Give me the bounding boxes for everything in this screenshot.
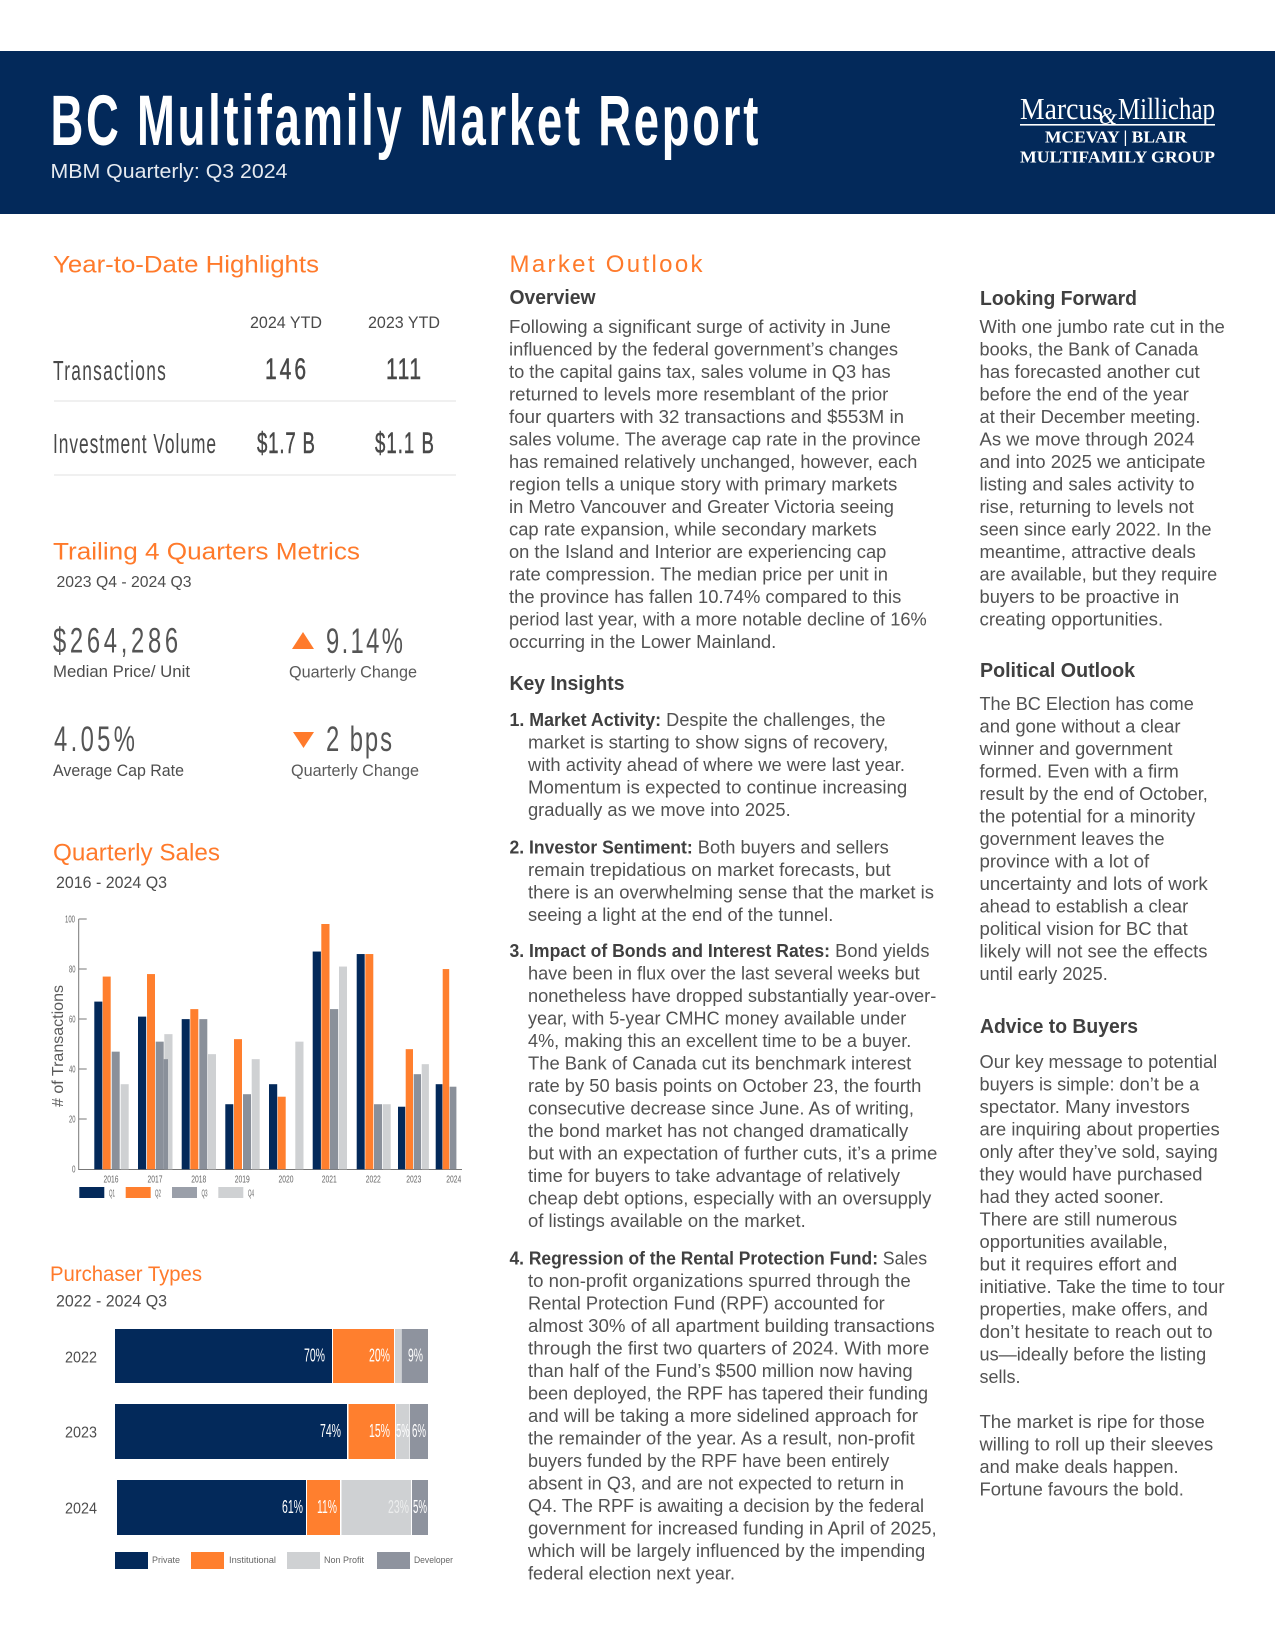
stacked bar: 2024: 5%	[413, 1497, 427, 1517]
insight 2: investor sentiment: seeing a light at the end of the tunnel.	[528, 905, 833, 925]
text block: political outlook: until early 2025.	[980, 964, 1108, 984]
logo: Marcus & Millichap McEvay Blair Multifamily Group: MCEVAY | BLAIR	[1045, 128, 1188, 146]
text block: advice to buyers: only after they’ve sold, saying	[980, 1142, 1218, 1162]
insight 4: regression of the rental protection fund: Q4. The RPF is awaiting a decision by the federal	[528, 1496, 924, 1516]
insight 4: regression of the rental protection fund: buyers funded by the RPF have been entirely	[528, 1451, 889, 1471]
insight 4: regression of the rental protection fund: almost 30% of all apartment building transactions	[528, 1316, 935, 1336]
panel: outlook right column	[978, 288, 1225, 1500]
text block: looking forward: before the end of the year	[980, 384, 1189, 404]
insight 4: regression of the rental protection fund: to non-profit organizations spurred through the	[528, 1271, 911, 1291]
text block: closing message: and make deals happen.	[980, 1457, 1178, 1477]
text block: overview: sales volume. The average cap rate in the province	[509, 430, 921, 450]
insight 1: market activity: 1. Market Activity:	[510, 710, 661, 730]
insight 1: market activity	[510, 710, 907, 820]
text block: overview: to the capital gains tax, sales volume in Q3 has	[509, 362, 891, 382]
heading: Market Outlook: Market Outlook	[510, 251, 704, 278]
x-axis labels: 2019	[235, 1174, 250, 1186]
row: investment volume	[53, 427, 434, 460]
text block: looking forward: buyers to be proactive in	[980, 587, 1179, 607]
row: transactions: 146	[265, 354, 306, 386]
text block: political outlook: ahead to establish a clear	[980, 896, 1188, 916]
text block: overview: Following a significant surge of activity in June	[509, 317, 891, 337]
logo: Marcus & Millichap McEvay Blair Multifamily Group: MULTIFAMILY GROUP	[1020, 148, 1215, 166]
text block: advice to buyers: are inquiring about properties	[980, 1120, 1220, 1140]
text block: looking forward: has forecasted another cut	[980, 362, 1200, 382]
text block: advice to buyers: spectator. Many investors	[980, 1097, 1190, 1117]
heading: Trailing 4 Quarters Metrics: Trailing 4 Quarters Metrics	[53, 538, 360, 566]
stacked bar: 2024: 23%	[388, 1497, 409, 1517]
y-axis labels: 80	[69, 964, 76, 976]
stacked bar: 2024	[65, 1480, 428, 1535]
subtitle: MBM Quarterly: Q3 2024	[50, 161, 288, 183]
text block: political outlook: political vision for BC that	[980, 919, 1188, 939]
metric: cap rate quarterly change	[291, 721, 419, 780]
stacked bar: 2024: 2024	[65, 1500, 97, 1518]
text block: political outlook	[978, 694, 1209, 984]
heading: Purchaser Types: Purchaser Types	[50, 1263, 202, 1286]
x-axis labels: 2024	[446, 1174, 461, 1186]
text block: looking forward: With one jumbo rate cut in the	[980, 317, 1225, 337]
panel: purchaser types	[50, 1263, 453, 1569]
insight 3: impact of bonds and interest rates: time for buyers to take advantage of relatively	[528, 1166, 900, 1186]
text block: overview: the province has fallen 10.74% compared to this	[509, 587, 901, 607]
metric: median price per unit: Median Price/ Unit	[53, 663, 190, 681]
legend: Institutional	[229, 1555, 276, 1566]
insight 4: regression of the rental protection fund: federal election next year.	[528, 1564, 735, 1584]
insight 3: impact of bonds and interest rates: but with an expectation of further cuts, it’s a prime	[528, 1144, 937, 1164]
subheading: Overview: Overview	[510, 287, 596, 309]
stacked bar: 2023: 5%	[396, 1421, 410, 1441]
insight 1: market activity: Despite the challenges, the	[666, 710, 886, 730]
legend: Q3	[202, 1188, 208, 1200]
logo: Marcus & Millichap McEvay Blair Multifamily Group	[1020, 91, 1215, 166]
row: transactions: 111	[386, 354, 421, 386]
x-axis labels: 2023	[406, 1174, 421, 1186]
insight 3: impact of bonds and interest rates: of listings available on the market.	[528, 1211, 806, 1231]
stacked bar: 2023	[65, 1404, 428, 1459]
metric: median price quarterly change	[289, 623, 417, 682]
insight 3: impact of bonds and interest rates: The Bank of Canada cut its benchmark interest	[528, 1054, 911, 1074]
row: transactions: Transactions	[53, 355, 166, 386]
metric: median price quarterly change: 9.14%	[326, 623, 403, 661]
metric: average cap rate: 4.05%	[54, 721, 135, 759]
insight 3: impact of bonds and interest rates: the bond market has not changed dramatically	[528, 1121, 908, 1141]
insight 3: impact of bonds and interest rates: Bond yields	[835, 941, 930, 961]
text block: closing message: The market is ripe for those	[980, 1412, 1205, 1432]
insight 4: regression of the rental protection fund: through the first two quarters of 2024. With more	[528, 1338, 929, 1358]
legend	[115, 1552, 453, 1569]
y-axis labels: 60	[69, 1014, 76, 1026]
text block: advice to buyers: they would have purchased	[980, 1164, 1202, 1184]
text block: advice to buyers: but it requires effort and	[980, 1254, 1177, 1274]
text block: overview: four quarters with 32 transactions and $553M in	[509, 407, 904, 427]
text block: looking forward: listing and sales activity to	[980, 474, 1194, 494]
row: investment volume: $1.1 B	[375, 427, 434, 460]
insight 2: investor sentiment: Both buyers and sellers	[698, 838, 889, 858]
insight 3: impact of bonds and interest rates: rate by 50 basis points on October 23, the fourth	[528, 1076, 921, 1096]
x-axis labels: 2016	[104, 1174, 119, 1186]
text block: political outlook: winner and government	[978, 739, 1172, 759]
y-axis labels: 0	[72, 1164, 76, 1176]
stacked bar: 2022: 70%	[304, 1346, 325, 1366]
logo: Marcus & Millichap McEvay Blair Multifamily Group: &	[1099, 104, 1117, 130]
insight 3: impact of bonds and interest rates: consecutive decrease since June. As of writing,	[528, 1098, 914, 1118]
metric: median price quarterly change: Quarterly Change	[289, 664, 417, 682]
subheading: Advice to Buyers: Advice to Buyers	[980, 1016, 1138, 1038]
stacked bar: 2024: 61%	[282, 1497, 303, 1517]
text block: advice to buyers: us—ideally before the listing	[980, 1344, 1206, 1364]
text block: overview	[509, 317, 927, 652]
insight 3: impact of bonds and interest rates	[510, 941, 937, 1231]
text block: overview: has remained relatively unchanged, however, each	[509, 452, 917, 472]
metric: median price per unit	[53, 622, 190, 681]
text block: advice to buyers: properties, make offers, and	[980, 1300, 1208, 1320]
insight 3: impact of bonds and interest rates: have been in flux over the last several weeks but	[528, 964, 920, 984]
legend: Private	[152, 1555, 180, 1566]
stacked bar: 2022: 9%	[408, 1346, 423, 1366]
insight 3: impact of bonds and interest rates: year, with 5-year CMHC money available under	[528, 1008, 906, 1028]
logo: Marcus & Millichap McEvay Blair Multifamily Group: Marcus	[1020, 91, 1103, 126]
text block: advice to buyers: opportunities available,	[980, 1232, 1168, 1252]
legend	[79, 1187, 254, 1200]
metric: median price per unit: $264,286	[53, 622, 178, 661]
insight 3: impact of bonds and interest rates: 4%, making this an excellent time to be a buyer.	[528, 1031, 911, 1051]
insight 4: regression of the rental protection fund: Sales	[883, 1248, 927, 1268]
heading: Quarterly Sales: Quarterly Sales	[53, 840, 220, 866]
header banner	[0, 51, 1275, 214]
y-axis labels: 20	[69, 1114, 76, 1126]
text block: political outlook: The BC Election has come	[980, 694, 1194, 714]
insight 3: impact of bonds and interest rates: nonetheless have dropped substantially year-over-	[528, 986, 936, 1006]
text block: advice to buyers	[980, 1052, 1224, 1387]
subheading: Key Insights: Key Insights	[510, 673, 624, 695]
stacked bar: 2023: 74%	[320, 1421, 341, 1441]
text block: political outlook: province with a lot of	[980, 852, 1150, 872]
date range: 2022 - 2024 Q3	[56, 1292, 167, 1310]
text block: advice to buyers: sells.	[980, 1367, 1020, 1387]
bars: Q3	[112, 1009, 456, 1169]
text block: looking forward: As we move through 2024	[980, 430, 1194, 450]
text block: closing message: Fortune favours the bold.	[980, 1480, 1184, 1500]
stacked bar: 2022	[65, 1329, 428, 1383]
row: investment volume: $1.7 B	[257, 427, 315, 460]
insight 3: impact of bonds and interest rates: 3. Impact of Bonds and Interest Rates:	[510, 941, 830, 961]
column headers: 2024 YTD	[250, 314, 322, 332]
text block: closing message: willing to roll up their sleeves	[978, 1434, 1213, 1454]
text block: looking forward	[980, 317, 1225, 630]
y-axis labels: 40	[69, 1064, 76, 1076]
text block: overview: returned to levels more resemblant of the prior	[509, 384, 888, 404]
text block: overview: influenced by the federal government’s changes	[509, 340, 898, 360]
metric: average cap rate: Average Cap Rate	[53, 762, 184, 780]
stacked bar: 2022: 2022	[65, 1350, 97, 1366]
insight 1: market activity: market is starting to show signs of recovery,	[528, 732, 888, 752]
text block: advice to buyers: initiative. Take the time to tour	[980, 1277, 1224, 1297]
y-axis labels: 100	[65, 914, 75, 926]
insight 1: market activity: with activity ahead of where we were last year.	[527, 755, 905, 775]
bars: Q2	[103, 924, 449, 1169]
column headers: 2023 YTD	[368, 314, 440, 332]
insight 2: investor sentiment: there is an overwhelming sense that the market is	[528, 882, 934, 902]
text block: looking forward: at their December meeting.	[980, 407, 1200, 427]
text block: political outlook: the potential for a minority	[980, 806, 1195, 826]
date range: 2023 Q4 - 2024 Q3	[56, 574, 192, 591]
insight 4: regression of the rental protection fund: been deployed, the RPF has tapered their funding	[528, 1384, 928, 1404]
subheading: Political Outlook: Political Outlook	[980, 660, 1136, 682]
text block: looking forward: rise, returning to levels not	[980, 497, 1194, 517]
insight 4: regression of the rental protection fund: which will be largely influenced by the impending	[527, 1541, 925, 1561]
y-axis title: # of Transactions	[50, 985, 67, 1107]
panel: quarterly sales: Q4	[248, 1188, 254, 1200]
stacked bar: 2024: 11%	[317, 1497, 337, 1517]
stacked bar: 2023: 2023	[65, 1424, 97, 1442]
y-axis labels	[65, 914, 76, 1176]
text block: advice to buyers: buyers is simple: don’t be a	[980, 1074, 1200, 1094]
legend: Q2	[155, 1188, 161, 1200]
text block: political outlook: uncertainty and lots of work	[980, 874, 1209, 894]
legend: Non Profit	[324, 1555, 364, 1566]
stacked bar: 2023: 15%	[369, 1421, 390, 1441]
row: transactions	[53, 354, 421, 386]
metric: cap rate quarterly change: 2 bps	[326, 721, 392, 759]
insight 2: investor sentiment	[510, 838, 934, 925]
x-axis labels	[104, 1174, 461, 1186]
subheading: Looking Forward: Looking Forward	[980, 288, 1137, 310]
insight 4: regression of the rental protection fund	[510, 1248, 937, 1584]
panel: quarterly sales	[50, 840, 462, 1200]
x-axis labels: 2021	[322, 1174, 337, 1186]
text block: political outlook: result by the end of October,	[980, 784, 1208, 804]
text block: looking forward: meantime, attractive deals	[980, 542, 1196, 562]
chart axes	[79, 919, 462, 1170]
text block: political outlook: likely will not see the effects	[980, 942, 1208, 962]
insight 4: regression of the rental protection fund: 4. Regression of the Rental Protection Fund:	[510, 1248, 878, 1268]
insight 4: regression of the rental protection fund: absent in Q3, and are not expected to return in	[528, 1474, 904, 1494]
stacked bar: 2023: 6%	[412, 1421, 426, 1441]
text block: political outlook: and gone without a clear	[980, 716, 1181, 736]
text block: overview: rate compression. The median price per unit in	[509, 564, 888, 584]
text block: looking forward: and into 2025 we anticipate	[980, 452, 1206, 472]
date range: 2016 - 2024 Q3	[56, 874, 167, 892]
text block: advice to buyers: Our key message to potential	[980, 1052, 1217, 1072]
bar series	[94, 924, 456, 1169]
text block: looking forward: creating opportunities.	[980, 610, 1163, 630]
insight 2: investor sentiment: remain trepidatious on market forecasts, but	[528, 860, 891, 880]
title: BC Multifamily Market Report	[50, 81, 758, 160]
insight 4: regression of the rental protection fund: government for increased funding in April of 2025,	[528, 1518, 937, 1538]
text block: looking forward: are available, but they require	[980, 564, 1217, 584]
panel: trailing 4 quarters metrics	[53, 538, 419, 780]
text block: overview: region tells a unique story with primary markets	[509, 474, 897, 494]
text block: overview: occurring in the Lower Mainland.	[509, 632, 776, 652]
panel: market outlook column	[509, 251, 937, 1584]
text block: overview: on the Island and Interior are experiencing cap	[509, 542, 886, 562]
heading: Year-to-Date Highlights: Year-to-Date Highlights	[53, 252, 319, 278]
insight 4: regression of the rental protection fund: than half of the Fund’s $500 million now having	[528, 1361, 913, 1381]
insight 4: regression of the rental protection fund: the remainder of the year. As a result, non-profit	[528, 1428, 915, 1448]
stacked bar: 2022: 20%	[369, 1346, 390, 1366]
column headers	[250, 314, 440, 332]
x-axis labels: 2020	[278, 1174, 294, 1186]
insight 4: regression of the rental protection fund: and will be taking a more sidelined approach for	[528, 1406, 918, 1426]
row: investment volume: Investment Volume	[53, 428, 216, 459]
insight 1: market activity: gradually as we move into 2025.	[528, 800, 791, 820]
logo: Marcus & Millichap McEvay Blair Multifamily Group: Millichap	[1118, 91, 1215, 126]
x-axis labels: 2022	[366, 1174, 381, 1186]
text block: advice to buyers: There are still numerous	[980, 1210, 1177, 1230]
text block: looking forward: seen since early 2022. In the	[980, 520, 1212, 540]
insight 2: investor sentiment: 2. Investor Sentiment:	[510, 838, 693, 858]
legend: Developer	[414, 1555, 453, 1566]
text block: overview: in Metro Vancouver and Greater Victoria seeing	[509, 497, 894, 517]
text block: overview: cap rate expansion, while secondary markets	[509, 520, 877, 540]
text block: looking forward: books, the Bank of Canada	[980, 340, 1199, 360]
insight 3: impact of bonds and interest rates: cheap debt options, especially with an oversupply	[528, 1188, 931, 1208]
x-axis labels: 2018	[191, 1174, 206, 1186]
insight 4: regression of the rental protection fund: Rental Protection Fund (RPF) accounted for	[528, 1294, 885, 1314]
text block: closing message	[978, 1412, 1213, 1500]
metric: cap rate quarterly change: Quarterly Change	[291, 762, 419, 780]
text block: advice to buyers: had they acted sooner.	[980, 1187, 1164, 1207]
panel: year-to-date highlights	[53, 252, 456, 476]
x-axis labels: 2017	[148, 1174, 163, 1186]
metric: average cap rate	[53, 721, 184, 780]
text block: political outlook: formed. Even with a firm	[980, 762, 1179, 782]
text block: political outlook: government leaves the	[980, 829, 1164, 849]
text block: overview: period last year, with a more notable decline of 16%	[509, 610, 927, 630]
legend: Q1	[109, 1188, 115, 1200]
insight 1: market activity: Momentum is expected to continue increasing	[528, 778, 907, 798]
bars: Q1	[94, 952, 442, 1169]
bars: Q4	[121, 967, 429, 1169]
text block: advice to buyers: don’t hesitate to reach out to	[980, 1322, 1212, 1342]
